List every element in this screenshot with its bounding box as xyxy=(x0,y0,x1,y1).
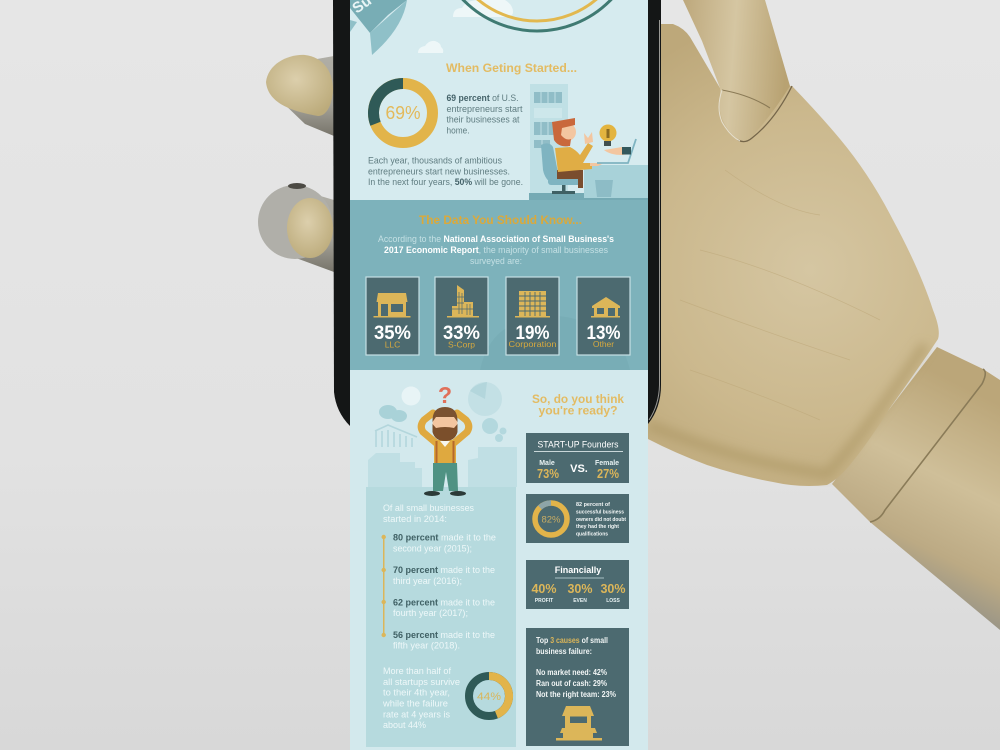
forearm xyxy=(832,347,1000,630)
donut: 44 percent: 44% xyxy=(477,691,501,703)
card: founders: START-UP Founders xyxy=(538,440,619,450)
card: 82 percent: qualifications xyxy=(576,532,608,538)
character: thinking man xyxy=(421,407,469,496)
text: 69 percent: 69 percent of U.S. xyxy=(446,93,518,104)
card: 82 percent: 82 percent of xyxy=(576,502,610,508)
timeline text: third year (2016); xyxy=(393,576,462,586)
timeline text: fourth year (2017); xyxy=(393,608,468,618)
clouds xyxy=(418,0,513,53)
intro text: surveyed are: xyxy=(470,256,522,266)
phone body xyxy=(333,0,661,426)
small pie xyxy=(402,386,420,406)
card: financially: Financially xyxy=(555,565,601,575)
text: each year xyxy=(368,156,523,188)
text: more than half: More than half of xyxy=(383,666,451,676)
text: 69 percent: their businesses at xyxy=(446,114,520,126)
text: survival intro: Of all small businesses xyxy=(383,503,474,513)
card: financially: LOSS xyxy=(606,598,620,604)
card: Corporation: Corporation xyxy=(508,339,557,349)
finger: lower xyxy=(258,183,334,272)
text: 69 percent: entrepreneurs start xyxy=(446,104,523,115)
intro text xyxy=(378,234,614,266)
card: Corporation: 19% xyxy=(516,323,550,344)
laptop xyxy=(597,139,636,163)
heading: ready xyxy=(532,392,624,418)
chair xyxy=(541,143,582,194)
text: each year: In the next four years, 50% will be gone. xyxy=(368,177,523,188)
heading: ready: So, do you think xyxy=(532,392,624,406)
card: S-Corp: S-Corp xyxy=(448,340,475,350)
card: LLC: 35% xyxy=(374,323,411,344)
text: 69 percent xyxy=(446,93,523,136)
timeline text: 70 percent made it to the xyxy=(393,565,495,575)
card: 82 percent xyxy=(526,494,629,543)
person xyxy=(552,118,604,188)
light bulb xyxy=(600,124,616,146)
timeline text: 62 percent made it to the xyxy=(393,598,495,608)
card: founders: Female xyxy=(595,460,619,467)
screen: upper section xyxy=(350,0,648,200)
section: data band xyxy=(350,200,648,370)
finger: upper xyxy=(266,55,334,136)
card: causes of failure: Ran out of cash: 29% xyxy=(536,679,607,688)
left panel xyxy=(366,447,517,747)
card: 82 percent: 82% xyxy=(541,514,561,526)
card: LLC xyxy=(366,277,419,355)
heading: data: The Data You Should Know... xyxy=(419,213,582,227)
card: founders: 27% xyxy=(597,467,619,481)
timeline text xyxy=(393,532,496,650)
thumb xyxy=(683,0,790,142)
timeline text: second year (2015); xyxy=(393,544,472,554)
trash can xyxy=(595,180,613,197)
card: financially: PROFIT xyxy=(535,598,553,604)
text: more than half: all startups survive xyxy=(383,677,460,687)
donut: 69 percent xyxy=(373,84,432,142)
text: more than half: rate at 4 years is xyxy=(383,710,451,720)
text: more than half: to their 4th year, xyxy=(383,688,450,698)
card: Corporation xyxy=(506,277,559,355)
text: survival intro xyxy=(383,503,474,524)
card: 82 percent: successful business xyxy=(576,510,624,516)
text: more than half: while the failure xyxy=(382,698,448,708)
card: LLC: LLC xyxy=(385,340,400,350)
card: Other: Other xyxy=(593,339,614,349)
card: financially: EVEN xyxy=(573,598,587,604)
timeline text: 80 percent made it to the xyxy=(393,532,496,542)
text: more than half xyxy=(382,666,460,730)
question mark: ? xyxy=(438,382,452,408)
card: S-Corp: 33% xyxy=(443,323,480,344)
card: causes of failure: No market need: 42% xyxy=(536,668,607,677)
text: 69 percent: home. xyxy=(446,126,470,136)
floor xyxy=(529,193,648,200)
palm xyxy=(648,24,939,486)
pie chart xyxy=(468,382,502,416)
text: survival intro: started in 2014: xyxy=(383,514,447,524)
bookshelf xyxy=(530,84,568,196)
text: each year: entrepreneurs start new businesses. xyxy=(368,166,510,178)
card: founders: 73% xyxy=(537,467,559,481)
card: financially: 40% xyxy=(531,582,557,596)
icon: market stall xyxy=(556,706,602,740)
hand holding bulb xyxy=(604,147,631,155)
card: financially: 30% xyxy=(600,582,626,596)
card: financially: 30% xyxy=(567,582,593,596)
bar chart xyxy=(375,425,417,447)
card: causes of failure xyxy=(526,628,629,746)
card: causes of failure: business failure: xyxy=(536,647,592,656)
background icons xyxy=(375,382,506,447)
desk xyxy=(584,165,648,198)
card: 82 percent: they had the right xyxy=(576,524,619,530)
intro text: 2017 Economic Report, the majority of small businesses xyxy=(384,245,608,255)
card: 82 percent: owners did not doubt xyxy=(576,517,626,523)
text: more than half: about 44% xyxy=(383,720,426,730)
card: founders xyxy=(526,433,629,483)
timeline xyxy=(382,535,386,637)
illustration: man at desk xyxy=(529,84,648,200)
text: each year: Each year, thousands of ambitious xyxy=(368,156,502,166)
heading: when getting started: When Geting Started... xyxy=(446,61,577,75)
timeline text: fifth year (2018). xyxy=(393,640,460,650)
card: founders: Male xyxy=(539,460,555,467)
card: S-Corp xyxy=(435,277,488,355)
card: causes of failure: Not the right team: 23% xyxy=(536,690,616,699)
card: financially xyxy=(526,560,629,609)
intro text: According to the National Association of Small Business's xyxy=(378,234,614,244)
speech bubbles xyxy=(379,405,407,422)
donut: 44 percent xyxy=(469,676,509,716)
heading: ready: you're ready? xyxy=(538,404,618,418)
wooden hand xyxy=(648,0,1000,630)
top circle arcs xyxy=(434,0,640,31)
card: founders: VS. xyxy=(570,463,588,475)
card: causes of failure: Top 3 causes of small xyxy=(536,636,608,645)
gears xyxy=(482,418,506,442)
donut: 69 percent: 69% xyxy=(386,103,420,123)
ribbon badge xyxy=(349,0,407,55)
card: Other: 13% xyxy=(586,323,621,344)
timeline text: 56 percent made it to the xyxy=(393,630,495,640)
card: Other xyxy=(577,277,630,355)
section: lower strip xyxy=(350,370,648,750)
